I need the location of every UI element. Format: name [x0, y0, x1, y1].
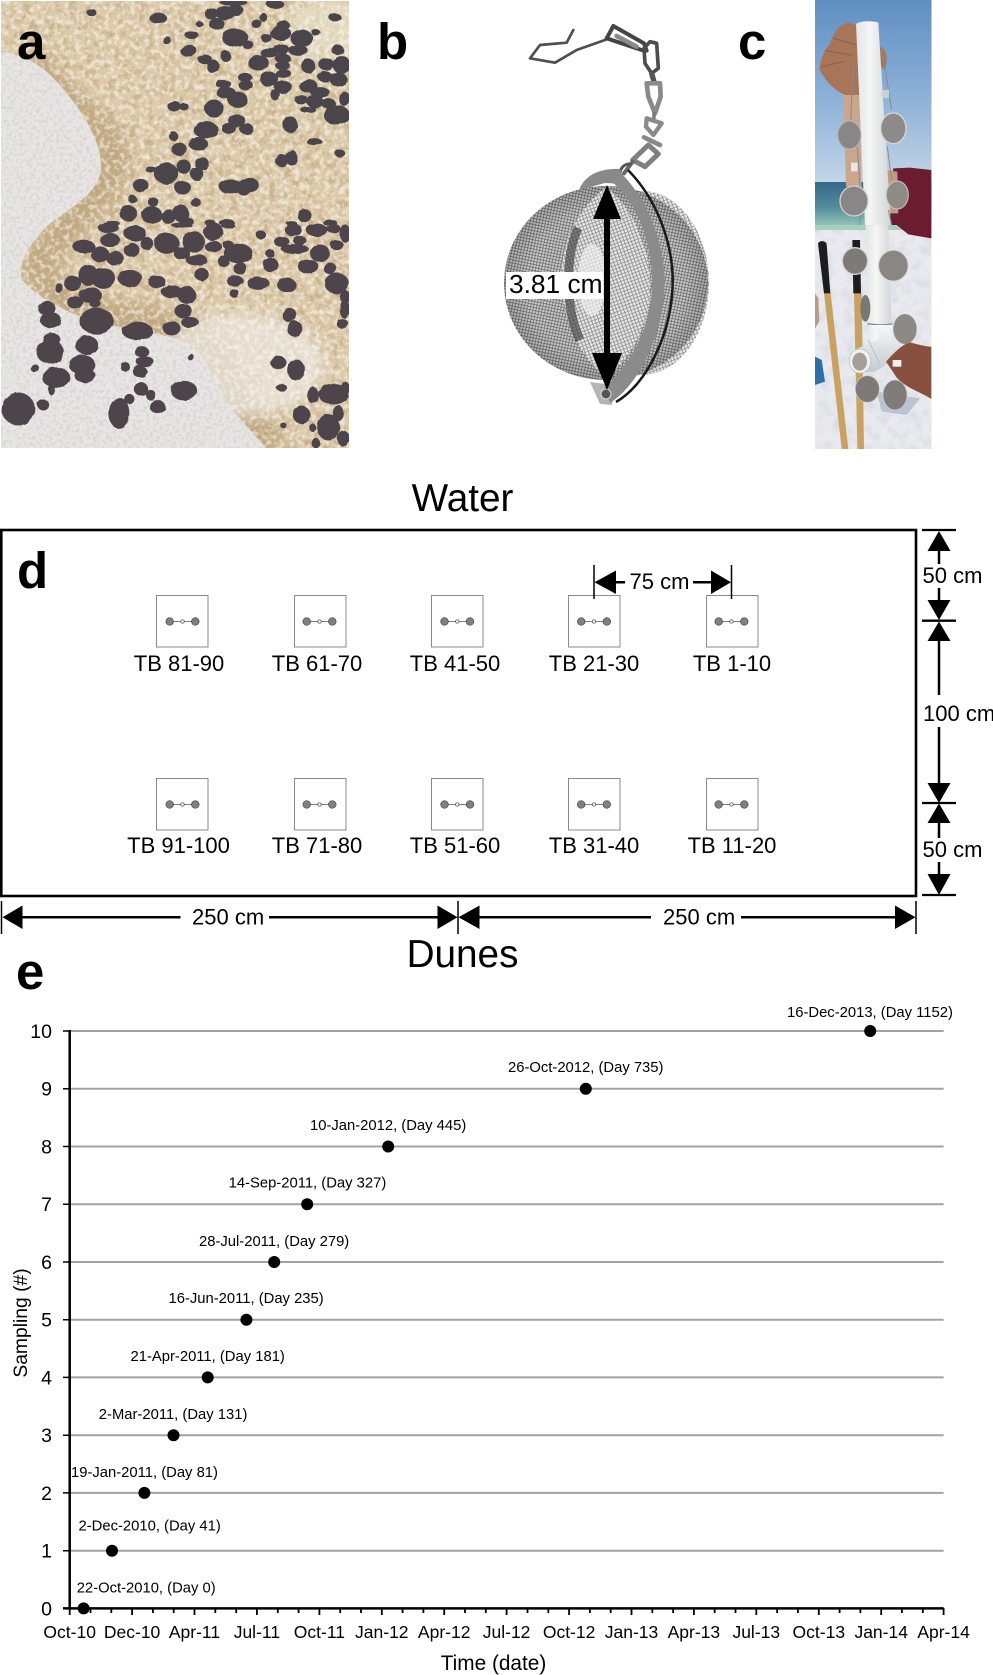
sampling date annotations: 14-Sep-2011, (Day 327): [229, 1176, 386, 1192]
sampling date annotations: 19-Jan-2011, (Day 81): [71, 1465, 218, 1481]
x axis labels: Oct-11: [294, 1622, 345, 1642]
dimension: bottom 250 cm + 250 cm: [2, 901, 916, 934]
plot TB 41-50: TB 41-50: [410, 651, 500, 676]
heading: Dunes: Dunes: [407, 933, 518, 976]
inner lens opening: [561, 187, 650, 378]
x axis labels: Dec-10: [104, 1622, 161, 1642]
plot TB 51-60: [410, 778, 500, 858]
dimension: right side 50, 100, 50 cm: 50 cm: [922, 563, 982, 588]
chain and hook: [530, 26, 662, 183]
bottom tab of rim: [590, 382, 615, 405]
y axis labels: 3: [41, 1425, 52, 1447]
rim band: [604, 174, 665, 403]
sampling date annotations: 10-Jan-2012, (Day 445): [310, 1118, 466, 1134]
dimension: bottom 250 cm + 250 cm: 250 cm: [663, 904, 735, 930]
aggregates: lower part: [2, 222, 350, 448]
y axis labels: 10: [30, 1021, 52, 1043]
panel c: photo of tea balls on PVC pole at the beach: [815, 0, 932, 450]
dimension: right side 50, 100, 50 cm: 50 cm: [922, 837, 982, 862]
y axis labels: 1: [41, 1541, 52, 1563]
aggregates: upper part: [87, 0, 350, 225]
y axis labels: 2: [41, 1483, 52, 1505]
y axis labels: 6: [41, 1252, 52, 1274]
plot TB 11-20: [688, 778, 776, 858]
y axis labels: 5: [41, 1310, 52, 1332]
plot TB 91-100: [127, 778, 230, 858]
sampling date annotations: [71, 1005, 953, 1597]
plot TB 11-20: TB 11-20: [688, 833, 776, 858]
plot TB 31-40: [549, 778, 639, 858]
x axis title: Time (date): [441, 1652, 546, 1675]
heading: Water: Water: [412, 477, 513, 520]
plot TB 31-40: TB 31-40: [549, 833, 639, 858]
lower half of pole, sticks and hand: [815, 225, 932, 449]
x axis labels: Oct-10: [43, 1622, 96, 1642]
x axis labels: Jan-14: [854, 1622, 908, 1642]
sampling date annotations: 16-Jun-2011, (Day 235): [168, 1291, 324, 1307]
top tab of rim: [579, 169, 626, 190]
sampling date annotations: 26-Oct-2012, (Day 735): [508, 1060, 664, 1076]
right mesh half: [575, 191, 709, 375]
y axis labels: 8: [41, 1136, 52, 1158]
x axis labels: Jul-13: [732, 1622, 780, 1642]
plot TB 71-80: [272, 778, 362, 858]
dimension: 75 cm spacing: 75 cm: [630, 569, 689, 594]
panel letter c: c: [738, 13, 766, 70]
x axis labels: Oct-13: [793, 1622, 845, 1642]
dimension: 75 cm spacing: [594, 565, 732, 599]
left mesh half: [504, 186, 708, 380]
diameter label: 3.81 cm: [509, 269, 603, 299]
y axis labels: 4: [41, 1367, 52, 1389]
double arrow: diameter: [592, 185, 622, 390]
x axis labels: Apr-13: [668, 1622, 720, 1642]
plot TB 1-10: [693, 596, 771, 676]
panel d: plot layout outline: [1, 530, 916, 896]
plot TB 91-100: TB 91-100: [127, 833, 230, 858]
plot TB 21-30: TB 21-30: [549, 651, 639, 676]
tea ball plots, top row: [134, 596, 771, 676]
x axis labels: Jul-11: [234, 1622, 280, 1642]
x axis labels: Oct-12: [543, 1622, 595, 1642]
panel e: sampling timeline chart: [11, 1005, 970, 1675]
sampling date annotations: 22-Oct-2010, (Day 0): [77, 1581, 216, 1597]
panel letter b: b: [377, 13, 408, 70]
y axis title: Sampling (#): [11, 1268, 32, 1378]
panel letter e: e: [16, 943, 44, 1000]
dimension: bottom 250 cm + 250 cm: 250 cm: [192, 904, 264, 930]
sampling date annotations: 2-Mar-2011, (Day 131): [99, 1407, 247, 1423]
x axis labels: Jan-13: [605, 1622, 658, 1642]
upper half of pole and hand: [819, 21, 931, 225]
panel letter a: a: [17, 13, 46, 70]
sampling date annotations: 28-Jul-2011, (Day 279): [199, 1234, 349, 1250]
plot TB 41-50: [410, 596, 500, 676]
sampling date annotations: 2-Dec-2010, (Day 41): [78, 1518, 221, 1534]
plot TB 71-80: TB 71-80: [272, 833, 362, 858]
y axis labels: [30, 1021, 52, 1620]
panel a: photo of oil aggregates on sand: [0, 0, 375, 450]
y axis labels: 0: [41, 1598, 52, 1620]
sampling date annotations: 16-Dec-2013, (Day 1152): [787, 1005, 953, 1021]
x axis labels: Apr-12: [418, 1622, 470, 1642]
plot TB 21-30: [549, 596, 639, 676]
x axis labels: Jul-12: [483, 1622, 530, 1642]
plot TB 81-90: TB 81-90: [134, 651, 224, 676]
x axis labels: Apr-14: [917, 1622, 970, 1642]
horizontal grid lines: [70, 1031, 944, 1551]
plot TB 81-90: [134, 596, 224, 676]
panel b: mesh tea ball photo: [504, 26, 709, 405]
panel letter d: d: [17, 542, 48, 599]
y axis labels: 7: [41, 1194, 52, 1216]
dimension: right side 50, 100, 50 cm: 100 cm: [923, 701, 993, 726]
axes and tick marks: [63, 1030, 944, 1615]
x axis labels: [43, 1622, 970, 1642]
tea ball plots, bottom row: [127, 778, 776, 858]
x axis labels: Apr-11: [169, 1622, 220, 1642]
sampling points: [78, 1025, 876, 1614]
plot TB 61-70: TB 61-70: [272, 651, 362, 676]
plot TB 51-60: TB 51-60: [410, 833, 500, 858]
sampling date annotations: 21-Apr-2011, (Day 181): [130, 1349, 285, 1365]
y axis labels: 9: [41, 1079, 52, 1101]
plot TB 1-10: TB 1-10: [693, 651, 771, 676]
plot TB 61-70: [272, 596, 362, 676]
x axis labels: Jan-12: [355, 1622, 409, 1642]
dimension: right side 50, 100, 50 cm: [922, 530, 993, 895]
